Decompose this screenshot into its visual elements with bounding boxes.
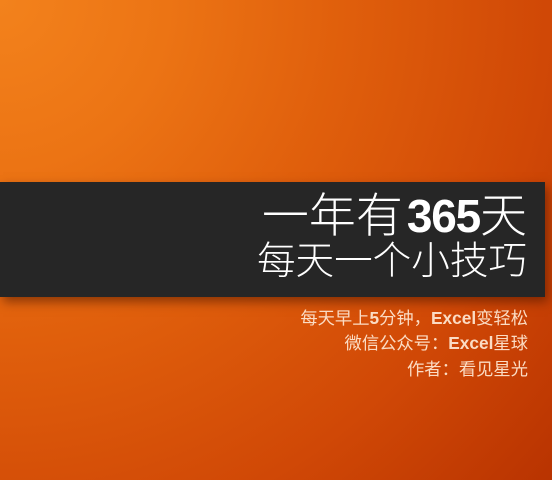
- subtitle: WeChat account: 微信公众号：Excel星球: [345, 333, 528, 353]
- title: line 1: 一年有365天: [262, 189, 527, 242]
- title: line 2: 每天一个小技巧: [257, 240, 527, 283]
- subtitle: tagline: 每天早上5分钟，Excel变轻松: [300, 308, 528, 328]
- dark title band: [0, 182, 545, 297]
- subtitle: author: 作者：看见星光: [407, 359, 528, 379]
